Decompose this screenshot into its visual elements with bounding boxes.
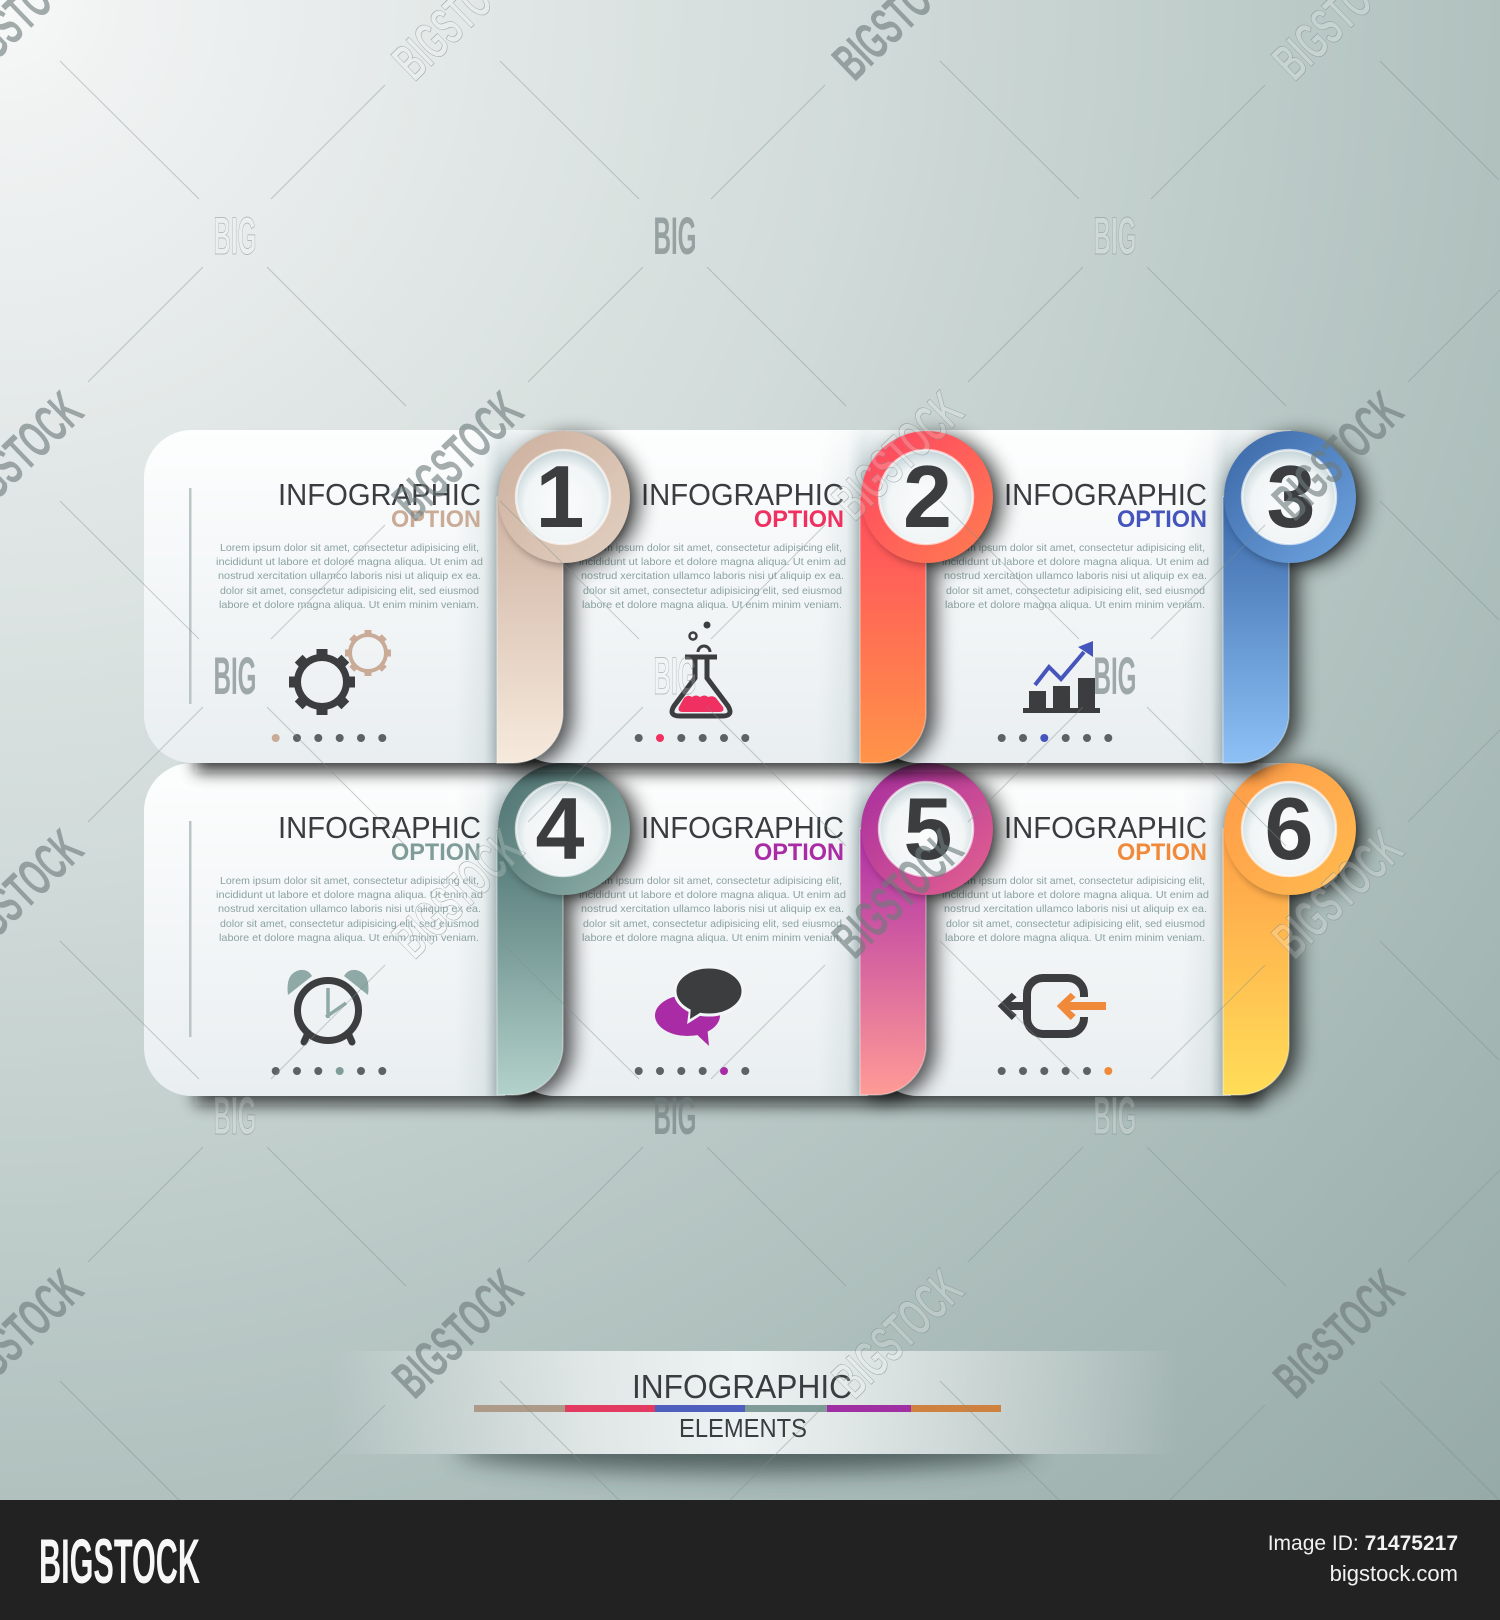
- card 1: [144, 430, 639, 767]
- body text: incididunt ut labore et dolore magna aliqua. Ut enim ad: [942, 556, 1209, 568]
- icon: gears: [289, 630, 391, 715]
- heading: INFOGRAPHIC: [1004, 477, 1207, 512]
- number badge 1: 1: [536, 447, 584, 546]
- text: BIG: [1094, 1087, 1136, 1146]
- progress dots: [635, 1067, 749, 1075]
- body text: [942, 875, 1209, 944]
- card 3: [870, 430, 1365, 767]
- number badge 3: [1224, 431, 1356, 566]
- watermark: BIG marks: BIG: [214, 647, 256, 706]
- body text: labore et dolore magna aliqua. Ut enim minim veniam.: [219, 599, 479, 611]
- number badge 5: 5: [904, 779, 952, 878]
- number badge 6: [1224, 763, 1356, 898]
- icon: chemistry flask: [672, 622, 730, 716]
- body text: incididunt ut labore et dolore magna aliqua. Ut enim ad: [216, 556, 483, 568]
- option label: OPTION: [391, 506, 481, 533]
- option label: OPTION: [1117, 506, 1207, 533]
- footer bar: [0, 1500, 1500, 1620]
- image id: Image ID: 71475217: [1268, 1532, 1458, 1555]
- body text: labore et dolore magna aliqua. Ut enim minim veniam.: [582, 932, 842, 944]
- body text: dolor sit amet, consectetur adipisicing elit, sed eiusmod: [946, 918, 1205, 930]
- bottom banner: infographic elements: [330, 1351, 1180, 1472]
- progress dots: [998, 1067, 1112, 1075]
- row 2 cast shadow: [195, 969, 1260, 1105]
- shadow: [869, 767, 1002, 1099]
- card 4: [144, 763, 639, 1099]
- text: BIG: [1094, 207, 1136, 266]
- number badge 6: 6: [1265, 779, 1313, 878]
- watermark: BIG marks: BIG: [654, 647, 696, 706]
- body text: Lorem ipsum dolor sit amet, consectetur adipisicing elit,: [583, 542, 842, 554]
- watermark: BIG marks: [214, 207, 1136, 1146]
- body text: Lorem ipsum dolor sit amet, consectetur adipisicing elit,: [583, 875, 842, 887]
- watermark: BIGSTOCK marks: BIGSTOCK: [822, 1259, 974, 1409]
- tab: [1223, 497, 1289, 763]
- body text: labore et dolore magna aliqua. Ut enim minim veniam.: [945, 932, 1205, 944]
- progress dots: [635, 734, 749, 742]
- card 2: [507, 430, 1002, 767]
- body text: dolor sit amet, consectetur adipisicing elit, sed eiusmod: [220, 918, 479, 930]
- body text: Lorem ipsum dolor sit amet, consectetur adipisicing elit,: [220, 542, 479, 554]
- heading: INFOGRAPHIC: [641, 477, 844, 512]
- body text: [942, 542, 1209, 611]
- watermark: BIGSTOCK marks: BIGSTOCK: [822, 381, 974, 531]
- banner heading: INFOGRAPHIC: [632, 1368, 852, 1405]
- watermark: BIGSTOCK marks: BIGSTOCK: [382, 381, 534, 531]
- multicolour bar: [474, 1405, 1001, 1412]
- body text: Lorem ipsum dolor sit amet, consectetur adipisicing elit,: [220, 875, 479, 887]
- body text: dolor sit amet, consectetur adipisicing elit, sed eiusmod: [946, 585, 1205, 597]
- shadow: [1232, 767, 1365, 1099]
- tab: [860, 497, 926, 763]
- watermark: BIG marks: BIG: [654, 1087, 696, 1146]
- body text: nostrud xercitation ullamco laboris nisi ut aliquip ex ea.: [944, 903, 1207, 915]
- heading: INFOGRAPHIC: [278, 477, 481, 512]
- icon: exit door arrows: [998, 978, 1106, 1034]
- text: BIG: [1094, 647, 1136, 706]
- body text: incididunt ut labore et dolore magna aliqua. Ut enim ad: [579, 556, 846, 568]
- body text: incididunt ut labore et dolore magna aliqua. Ut enim ad: [579, 889, 846, 901]
- body text: Lorem ipsum dolor sit amet, consectetur adipisicing elit,: [946, 542, 1205, 554]
- body text: labore et dolore magna aliqua. Ut enim minim veniam.: [219, 932, 479, 944]
- heading: INFOGRAPHIC: [641, 810, 844, 845]
- body text: dolor sit amet, consectetur adipisicing elit, sed eiusmod: [583, 585, 842, 597]
- icon: speech bubbles: [655, 967, 743, 1046]
- body text: nostrud xercitation ullamco laboris nisi ut aliquip ex ea.: [218, 903, 481, 915]
- progress dots: [998, 734, 1112, 742]
- body text: [216, 542, 483, 611]
- number badge 5: [861, 763, 993, 898]
- body text: dolor sit amet, consectetur adipisicing elit, sed eiusmod: [220, 585, 479, 597]
- body text: nostrud xercitation ullamco laboris nisi ut aliquip ex ea.: [581, 570, 844, 582]
- watermark: BIG marks: BIG: [214, 207, 256, 266]
- option label: OPTION: [1117, 839, 1207, 866]
- row 1 cast shadow: [195, 649, 1260, 772]
- body text: Lorem ipsum dolor sit amet, consectetur adipisicing elit,: [946, 875, 1205, 887]
- number badge 3: 3: [1267, 447, 1315, 546]
- progress dots: [272, 1067, 386, 1075]
- progress dots: [272, 734, 386, 742]
- shadow: [506, 435, 639, 767]
- tab: [860, 829, 926, 1095]
- body text: labore et dolore magna aliqua. Ut enim minim veniam.: [945, 599, 1205, 611]
- icon: alarm clock: [288, 970, 368, 1042]
- body text: [579, 875, 846, 944]
- watermark: BIGSTOCK marks: BIGSTOCK: [1262, 819, 1414, 969]
- body text: nostrud xercitation ullamco laboris nisi ut aliquip ex ea.: [218, 570, 481, 582]
- number badge 2: 2: [903, 447, 952, 546]
- icon: growth bar chart: [1023, 641, 1100, 713]
- shadow: [869, 435, 1002, 767]
- watermark: BIGSTOCK marks: BIGSTOCK: [1262, 381, 1414, 531]
- body text: [579, 542, 846, 611]
- banner subheading: ELEMENTS: [679, 1413, 807, 1443]
- watermark: BIGSTOCK marks: BIGSTOCK: [1263, 1259, 1415, 1409]
- body text: nostrud xercitation ullamco laboris nisi ut aliquip ex ea.: [944, 570, 1207, 582]
- number badge 2: [861, 431, 993, 566]
- body text: [216, 875, 483, 944]
- number badge 4: 4: [536, 779, 585, 878]
- banner shadow: [447, 1454, 1042, 1489]
- watermark: BIGSTOCK marks: BIGSTOCK: [822, 819, 974, 969]
- card 6: [870, 763, 1365, 1099]
- watermark: BIG marks: BIG: [214, 1087, 256, 1146]
- shadow: [506, 767, 639, 1099]
- option label: OPTION: [391, 839, 481, 866]
- option label: OPTION: [754, 506, 844, 533]
- body text: nostrud xercitation ullamco laboris nisi ut aliquip ex ea.: [581, 903, 844, 915]
- vertical rule: [189, 488, 192, 704]
- shadow: [1232, 435, 1365, 767]
- banner band: [330, 1351, 1180, 1454]
- footer bar: BIGSTOCK: [39, 1527, 200, 1597]
- body text: labore et dolore magna aliqua. Ut enim minim veniam.: [582, 599, 842, 611]
- number badge 4: [498, 763, 630, 898]
- option label: OPTION: [754, 839, 844, 866]
- heading: INFOGRAPHIC: [1004, 810, 1207, 845]
- tab: [1223, 829, 1289, 1095]
- vertical rule: [189, 821, 192, 1037]
- watermark: BIGSTOCK marks: BIGSTOCK: [382, 1259, 534, 1409]
- tab: [497, 829, 563, 1095]
- number badge 1: [498, 431, 630, 566]
- watermark: BIG marks: BIG: [654, 207, 696, 266]
- body text: incididunt ut labore et dolore magna aliqua. Ut enim ad: [216, 889, 483, 901]
- heading: INFOGRAPHIC: [278, 810, 481, 845]
- card 5: [507, 763, 1002, 1099]
- watermark: BIGSTOCK marks: BIGSTOCK: [382, 819, 534, 969]
- body text: dolor sit amet, consectetur adipisicing elit, sed eiusmod: [583, 918, 842, 930]
- tab: [497, 497, 563, 763]
- body text: incididunt ut labore et dolore magna aliqua. Ut enim ad: [942, 889, 1209, 901]
- footer site: bigstock.com: [1330, 1561, 1458, 1586]
